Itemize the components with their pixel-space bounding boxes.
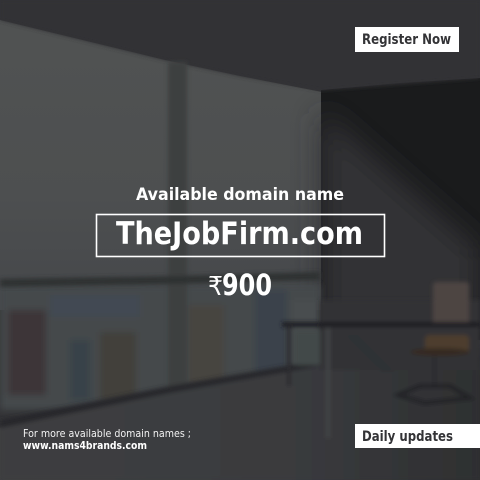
heading: Available domain name: Available domain name — [136, 185, 344, 205]
button: Register Now: Register Now — [362, 32, 451, 48]
button: Register Now — [355, 27, 459, 52]
desk top — [282, 322, 480, 327]
desk legs — [287, 326, 291, 386]
chair base — [398, 386, 470, 403]
price — [208, 268, 272, 302]
wall light falloff — [321, 110, 480, 340]
dark right wall base — [321, 78, 480, 340]
window pillar — [168, 62, 187, 392]
floor — [0, 348, 480, 480]
domain name box: TheJobFirm.com — [116, 216, 363, 252]
price: ₹ — [208, 272, 223, 302]
ceiling — [0, 0, 480, 90]
window wall base — [0, 20, 322, 310]
right lower wall — [320, 300, 480, 370]
chair back — [433, 282, 469, 324]
label: Daily updates — [355, 424, 480, 448]
footer text: www.nams4brands.com — [23, 440, 147, 452]
footer text: For more available domain names ; — [23, 427, 191, 440]
window rail — [0, 272, 320, 287]
city view — [0, 285, 320, 410]
label: Daily updates: Daily updates — [362, 429, 453, 445]
footer text — [23, 427, 191, 452]
chair seat — [425, 335, 469, 353]
floor base — [0, 348, 480, 480]
price: 900 — [222, 268, 272, 302]
